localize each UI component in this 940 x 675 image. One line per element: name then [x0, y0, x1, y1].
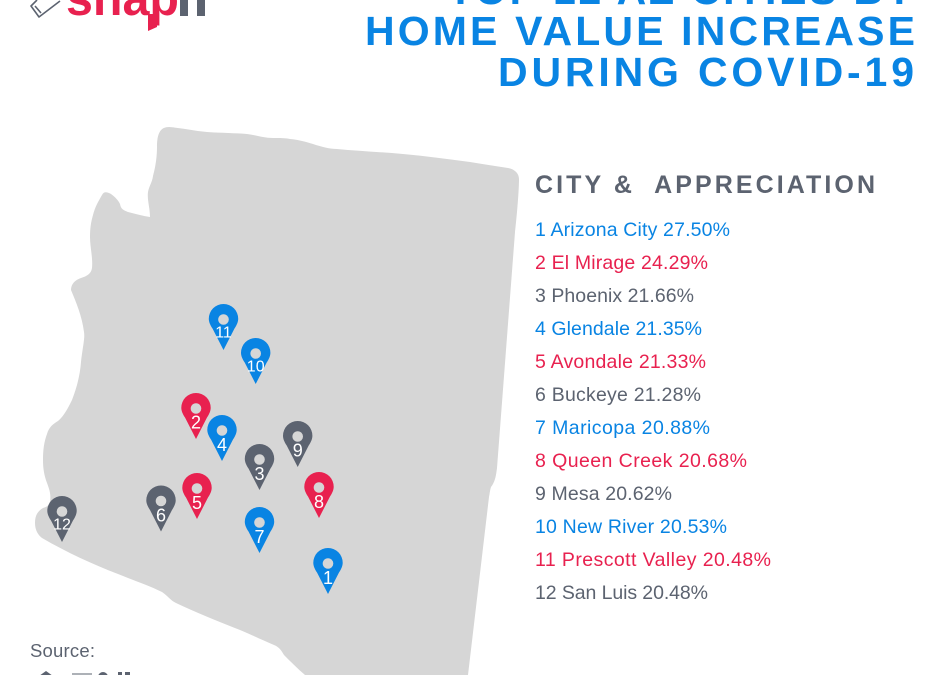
source logo: Zillow: [39, 671, 130, 675]
legend list: 8 Queen Creek 20.68%: [535, 450, 747, 472]
icon: tag outline: [31, 0, 60, 17]
pin 5: 5: [192, 493, 202, 513]
pin 10: [241, 338, 270, 384]
pin 2: [181, 393, 211, 439]
legend list: 11 Prescott Valley 20.48%: [535, 549, 771, 571]
legend list: 12 San Luis 20.48%: [535, 582, 708, 604]
pin 4: [207, 415, 237, 461]
legend list: 4 Glendale 21.35%: [535, 318, 702, 340]
legend heading: CITY & APPRECIATION: [535, 171, 875, 199]
pin 7: [245, 507, 274, 553]
logo: snapit: [31, 0, 205, 31]
pin 12: 12: [53, 516, 71, 534]
pin 6: 6: [156, 506, 166, 526]
pin 1: [313, 548, 343, 594]
pin 6: [146, 486, 176, 532]
pin 1: 1: [323, 568, 333, 588]
pin 11: [209, 304, 238, 350]
pin 4: 4: [217, 435, 227, 455]
pin 12: [47, 496, 77, 542]
pin 2: 2: [191, 412, 201, 432]
legend list: [535, 219, 771, 604]
title: DURING COVID-19: [498, 49, 914, 95]
legend list: 1 Arizona City 27.50%: [535, 219, 730, 241]
title: HOME VALUE INCREASE: [365, 8, 915, 54]
pin 3: [245, 444, 274, 490]
pin 9: 9: [293, 440, 303, 460]
pin 7: 7: [254, 527, 265, 547]
title: [365, 0, 915, 95]
pin 8: [304, 472, 334, 518]
pin 3: 3: [254, 464, 265, 484]
source label: Source:: [30, 640, 95, 661]
legend list: 10 New River 20.53%: [535, 516, 727, 538]
legend list: 3 Phoenix 21.66%: [535, 285, 694, 307]
map: Arizona silhouette: [35, 127, 519, 675]
legend list: 9 Mesa 20.62%: [535, 483, 672, 505]
legend list: 7 Maricopa 20.88%: [535, 417, 710, 439]
pin 5: [182, 473, 212, 519]
legend list: 2 El Mirage 24.29%: [535, 252, 708, 274]
pin 10: 10: [247, 358, 265, 376]
pin 9: [283, 421, 312, 467]
pin 11: 11: [215, 324, 232, 342]
legend list: 5 Avondale 21.33%: [535, 351, 706, 373]
pin 8: 8: [314, 492, 324, 512]
legend list: 6 Buckeye 21.28%: [535, 384, 701, 406]
